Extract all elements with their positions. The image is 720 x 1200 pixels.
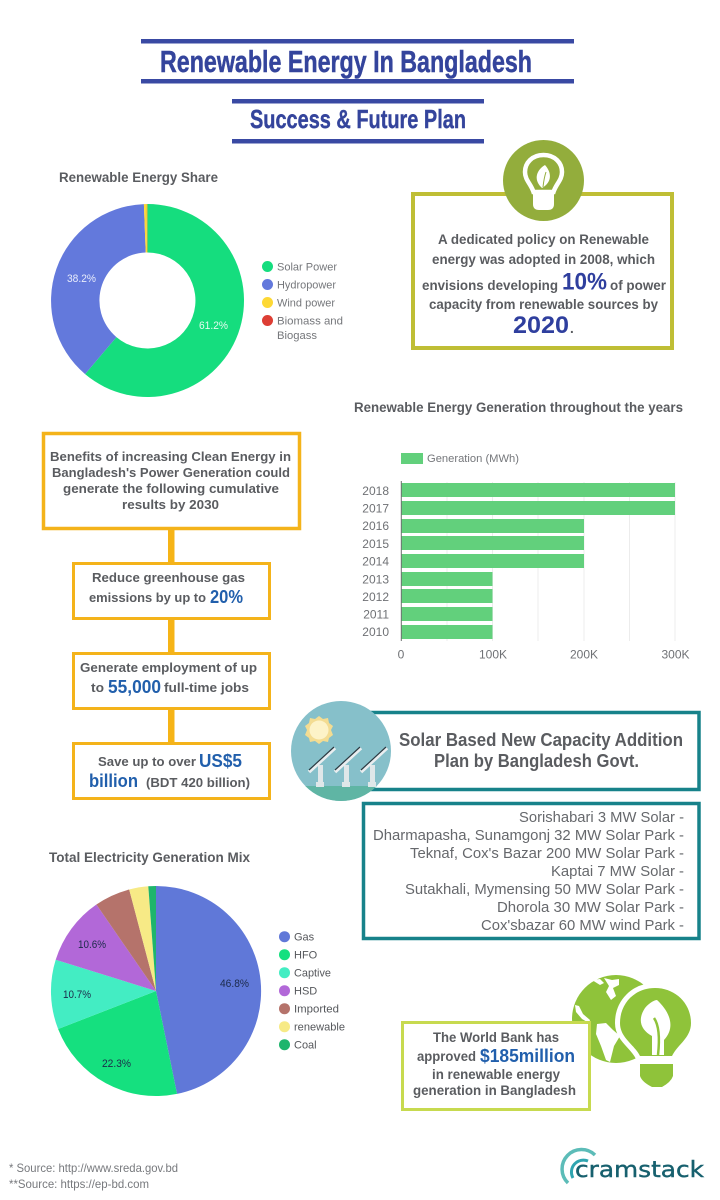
panel: benefits heading: generate the following cumulative	[63, 481, 279, 496]
panel: benefits heading: results by 2030	[122, 497, 219, 512]
panel: policy callout	[413, 194, 672, 348]
pie chart: generation mix: 10.6%	[78, 939, 106, 951]
legend: renewable energy share: Hydropower	[277, 280, 336, 292]
panel: solar project list: Cox'sbazar 60 MW wind Park -	[481, 917, 684, 934]
heading: generation chart: Renewable Energy Generation throughout the years	[354, 400, 683, 415]
panel: greenhouse gas: emissions by up to	[89, 590, 206, 605]
icon: globe and bulb	[572, 975, 691, 1087]
donut chart: renewable energy share: 38.2%	[67, 273, 96, 285]
panel: solar project list: Teknaf, Cox's Bazar 200 MW Solar Park -	[410, 845, 684, 862]
bar chart: generation by year: 2015	[362, 537, 389, 551]
panel: employment: to	[91, 680, 104, 695]
source notes: * Source: http://www.sreda.gov.bd	[9, 1161, 178, 1175]
subtitle: Success & Future Plan	[250, 104, 466, 134]
bar chart: generation by year: 2016	[362, 519, 389, 533]
source notes: **Source: https://ep-bd.com	[9, 1177, 149, 1191]
icon: light bulb with leaf	[503, 140, 584, 221]
connector: benefits flow	[168, 530, 174, 742]
legend: generation mix	[279, 931, 345, 1052]
panel: solar project list: Sutakhali, Mymensing 50 MW Solar Park -	[405, 881, 684, 898]
panel: policy callout: energy was adopted in 2008, which	[432, 252, 655, 267]
source notes	[9, 1161, 178, 1191]
panel: policy callout: capacity from renewable sources by	[429, 297, 658, 312]
bar chart: generation by year: 2017	[362, 502, 389, 516]
icon: solar panels	[291, 701, 391, 801]
panel: world bank callout: approved	[417, 1049, 476, 1064]
panel: solar project list: Kaptai 7 MW Solar -	[551, 863, 684, 880]
panel: policy callout: envisions developing	[422, 278, 558, 293]
panel: world bank callout: generation in Bangladesh	[413, 1083, 576, 1098]
pie chart: generation mix: 22.3%	[102, 1058, 131, 1070]
panel: solar project list: Sorishabari 3 MW Solar -	[519, 809, 684, 826]
subtitle	[232, 99, 484, 144]
donut chart: renewable energy share: 61.2%	[199, 320, 228, 332]
legend: generation mix: HFO	[294, 950, 318, 962]
panel: savings	[74, 744, 270, 798]
panel: solar plan heading	[340, 712, 699, 790]
panel: employment	[74, 654, 270, 708]
panel: employment: 55,000	[108, 677, 161, 697]
legend: renewable energy share: Wind power	[277, 298, 335, 310]
panel: employment: Generate employment of up	[80, 660, 257, 675]
legend: generation mix: HSD	[294, 986, 317, 998]
pie chart: generation mix: 10.7%	[63, 989, 91, 1001]
panel: policy callout: of power	[610, 278, 667, 293]
heading: generation mix: Total Electricity Generation Mix	[49, 850, 250, 865]
panel: solar project list	[364, 804, 699, 938]
legend: generation mix: Gas	[294, 932, 315, 944]
bar chart: generation by year: 300K	[661, 648, 690, 662]
panel: policy callout: 2020	[513, 312, 569, 339]
panel: greenhouse gas	[74, 564, 270, 618]
panel: greenhouse gas: Reduce greenhouse gas	[92, 570, 245, 585]
panel: benefits heading: Bangladesh's Power Generation could	[52, 465, 290, 480]
bar chart: generation by year: 2013	[362, 572, 389, 586]
panel: policy callout: 10%	[562, 268, 607, 296]
bar chart: generation by year: 100K	[479, 648, 507, 662]
pie chart: generation mix	[51, 886, 261, 1096]
title: Renewable Energy In Bangladesh	[160, 44, 532, 79]
panel: world bank callout: in renewable energy	[432, 1067, 560, 1082]
legend: generation mix: Imported	[294, 1004, 339, 1016]
bar chart: generation by year: 2018	[362, 484, 389, 498]
panel: world bank callout: The World Bank has	[433, 1030, 559, 1045]
legend: renewable energy share	[262, 261, 343, 342]
panel: employment: full-time jobs	[164, 680, 249, 695]
donut chart: renewable energy share	[51, 204, 244, 397]
legend: renewable energy share: Biogass	[277, 330, 318, 342]
panel: world bank callout: $185million	[480, 1046, 575, 1066]
panel: policy callout: A dedicated policy on Renewable	[438, 232, 649, 247]
panel: policy callout: .	[570, 321, 574, 336]
pie chart: generation mix: 46.8%	[220, 978, 249, 990]
bar chart: generation by year: Generation (MWh)	[427, 453, 519, 465]
legend: renewable energy share: Biomass and	[277, 316, 343, 328]
panel: savings: Save up to over	[98, 754, 196, 769]
panel: solar plan heading: Solar Based New Capacity Addition	[399, 730, 683, 750]
bar chart: generation by year: 2011	[363, 608, 389, 622]
bar chart: generation by year: 0	[398, 648, 405, 662]
panel: solar project list: Dhorola 30 MW Solar Park -	[497, 899, 684, 916]
panel: greenhouse gas: 20%	[210, 587, 243, 607]
bar chart: generation by year: 200K	[570, 648, 598, 662]
panel: clean energy benefits flow	[44, 434, 300, 798]
title	[141, 39, 574, 84]
panel: benefits heading: Benefits of increasing Clean Energy in	[50, 449, 291, 464]
heading: renewable energy share: Renewable Energy Share	[59, 170, 218, 185]
logo: cramstack	[562, 1150, 704, 1183]
bar chart: generation by year: 2014	[362, 554, 389, 568]
panel: savings: US$5	[199, 751, 242, 771]
bar chart: generation by year	[362, 453, 690, 662]
legend: generation mix: Coal	[294, 1040, 317, 1052]
panel: solar project list: Dharmapasha, Sunamgonj 32 MW Solar Park -	[373, 827, 684, 844]
legend: generation mix: Captive	[294, 968, 331, 980]
bar chart: generation by year: 2010	[362, 625, 389, 639]
logo: cramstack: cramstack	[575, 1158, 704, 1183]
bar chart: generation by year: 2012	[362, 590, 389, 604]
legend: renewable energy share: Solar Power	[277, 262, 337, 274]
panel: world bank callout	[402, 1022, 590, 1110]
panel: savings: billion	[89, 771, 138, 791]
panel: solar plan heading: Plan by Bangladesh Govt.	[434, 751, 639, 771]
panel: savings: (BDT 420 billion)	[146, 775, 250, 790]
panel: benefits heading	[44, 434, 300, 528]
legend: generation mix: renewable	[294, 1022, 345, 1034]
